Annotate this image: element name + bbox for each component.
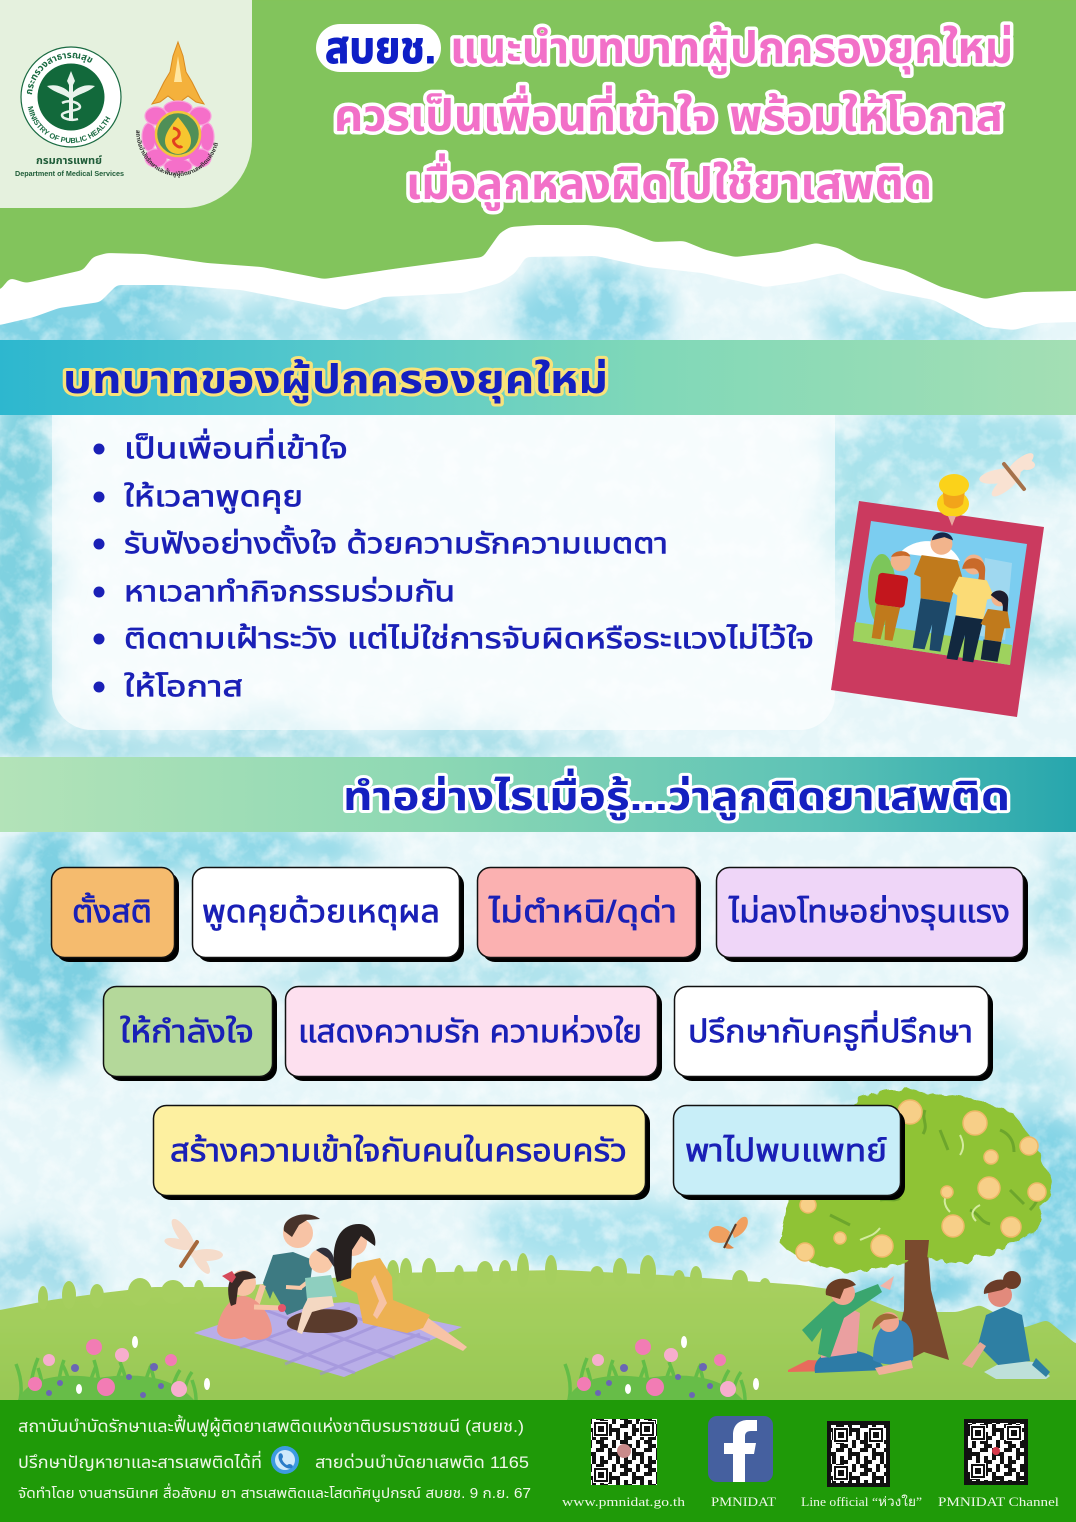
bullet list: parent roles: รับฟังอย่างตั้งใจ ด้วยความรักความเมตตา [124, 525, 668, 560]
icon: facebook [708, 1416, 773, 1482]
QR code: Line official [827, 1421, 890, 1487]
button: show love [286, 986, 662, 1081]
title: เมื่อลูกหลงผิดไปใช้ยาเสพติด [406, 153, 932, 211]
section banner: what to do [0, 757, 1076, 832]
button: see a doctor [674, 1106, 905, 1200]
logo: Ministry of Public Health: กระทรวงสาธารณสุข [26, 52, 93, 94]
footer text block: จัดทำโดย งานสารนิเทศ สื่อสังคม ยา สารเสพติดและโสตทัศนูปกรณ์ สบยช. 9 ก.ย. 67 [18, 1483, 531, 1502]
button: reasoned talk [192, 868, 464, 962]
photo: pinned family polaroid [831, 474, 1044, 717]
bullet list: parent roles: ติดตามเฝ้าระวัง แต่ไม่ใช่การจับผิดหรือระแวงไม่ไว้ใจ [124, 623, 814, 655]
action buttons [52, 868, 1028, 1200]
bullet list: parent roles: ให้เวลาพูดคุย [124, 481, 303, 514]
figure: father [255, 1214, 358, 1333]
logo: Ministry of Public Health [15, 46, 124, 178]
section banner: what to do: ทำอย่างไรเมื่อรู้...ว่าลูกติดยาเสพติด [343, 768, 1010, 821]
pill: organisation: สบยช. [325, 24, 436, 73]
footer text block: ปรึกษาปัญหายาและสารเสพติดได้ที่ [18, 1450, 262, 1472]
mother [943, 552, 1000, 664]
footer text block [18, 1414, 531, 1502]
person: child [872, 1312, 913, 1375]
button: see a doctor: พาไปพบแพทย์ [685, 1133, 887, 1168]
logo: Ministry of Public Health: MINISTRY OF PUBLIC HEALTH [28, 106, 110, 144]
icon: butterfly [709, 1217, 748, 1249]
bullet list: parent roles: ให้โอกาส [124, 671, 243, 703]
button: no violence [716, 868, 1028, 962]
bullet list: parent roles [94, 428, 814, 703]
button: no violence: ไม่ลงโทษอย่างรุนแรง [728, 894, 1010, 930]
footer captions [562, 1494, 1059, 1509]
bullet list: parent roles: เป็นเพื่อนที่เข้าใจ [124, 428, 348, 465]
illustration: picnic family [194, 1214, 467, 1377]
button: stay calm [52, 868, 179, 962]
illustration: money tree with family [780, 1090, 1050, 1379]
icon: phone [271, 1446, 299, 1474]
person: left adult [788, 1276, 894, 1373]
father [904, 529, 970, 653]
logo: PMNIDAT lotus [136, 40, 218, 178]
panel: parent roles list background [52, 415, 835, 730]
footer [0, 1400, 1076, 1522]
boy [870, 548, 912, 642]
footer captions: www.pmnidat.go.th [562, 1494, 686, 1509]
section banner: parent roles: บทบาทของผู้ปกครองยุคใหม่ [63, 357, 608, 404]
flowers centre [565, 1336, 759, 1400]
white torn paper edge [0, 0, 1076, 330]
logo: PMNIDAT lotus: สถาบันบำบัดรักษาและฟื้นฟูผู้ติดยาเสพติดแห่งชาติ [136, 130, 218, 178]
girl [976, 588, 1015, 663]
icon: dragonfly top [978, 449, 1037, 500]
footer captions: PMNIDAT [711, 1494, 776, 1509]
footer text block: สายด่วนบำบัดยาเสพติด 1165 [315, 1453, 529, 1472]
button: show love: แสดงความรัก ความห่วงใย [298, 1014, 642, 1049]
bullet list: parent roles: หาเวลาทำกิจกรรมร่วมกัน [124, 576, 455, 608]
logo: Ministry of Public Health: Department of Medical Services [15, 171, 124, 178]
button: no blaming [478, 868, 701, 962]
QR code: channel [964, 1419, 1028, 1485]
title: แนะนำบทบาทผู้ปกครองยุคใหม่ [450, 24, 1013, 75]
button: reasoned talk: พูดคุยด้วยเหตุผล [202, 894, 440, 930]
footer captions: PMNIDAT Channel [938, 1494, 1059, 1509]
flowers left [16, 1336, 210, 1400]
icon: dragonfly bottom [163, 1216, 223, 1276]
footer text block: สถาบันบำบัดรักษาและฟื้นฟูผู้ติดยาเสพติดแห่งชาติบรมราชชนนี (สบยช.) [18, 1414, 524, 1438]
title: ควรเป็นเพื่อนที่เข้าใจ พร้อมให้โอกาส [334, 85, 1003, 141]
button: encourage: ให้กำลังใจ [120, 1014, 254, 1049]
button: consult teacher: ปรึกษากับครูที่ปรึกษา [688, 1010, 973, 1050]
figure: toddler [286, 1248, 337, 1334]
figure: girl [217, 1270, 286, 1340]
button: consult teacher [674, 986, 993, 1081]
button: stay calm: ตั้งสติ [72, 892, 152, 929]
person: right adult [962, 1271, 1050, 1379]
logo panel [0, 0, 252, 208]
button: family understanding [154, 1106, 650, 1200]
button: family understanding: สร้างความเข้าใจกับคนในครอบครัว [170, 1133, 627, 1168]
logo: Ministry of Public Health: กรมการแพทย์ [36, 155, 102, 167]
figure: mother [334, 1224, 467, 1351]
button: no blaming: ไม่ตำหนิ/ดุด่า [488, 894, 677, 930]
footer captions: Line official “ห่วงใย” [801, 1494, 922, 1509]
grass field [0, 1253, 1076, 1402]
QR code: website [591, 1419, 657, 1485]
button: encourage [104, 986, 277, 1081]
icon: push pin [937, 474, 969, 526]
title [316, 24, 1013, 211]
section banner: parent roles [0, 340, 1076, 415]
top green header [0, 0, 1076, 330]
